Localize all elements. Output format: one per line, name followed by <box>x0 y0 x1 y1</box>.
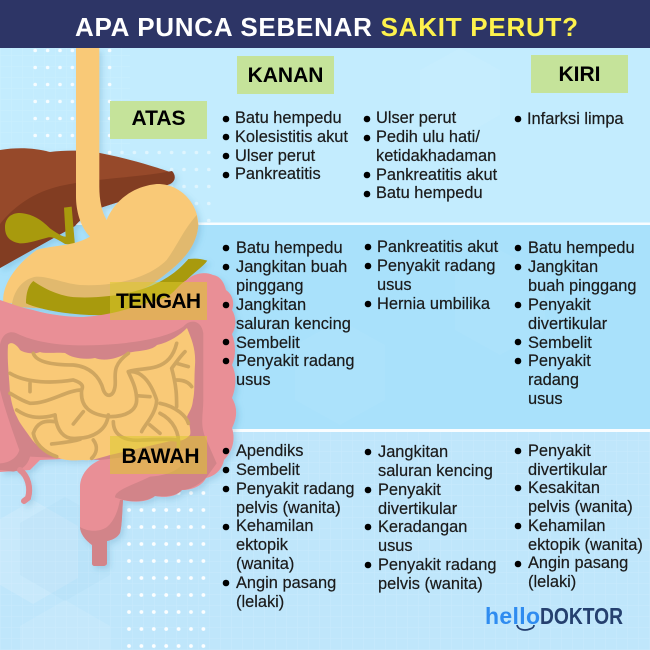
list: bawah kiri: Kesakitan <box>528 479 600 497</box>
list: bawah kiri: Penyakit <box>528 442 591 460</box>
list: bawah kanan: Angin pasang <box>236 574 336 592</box>
list: tengah kiri: Batu hempedu <box>528 239 635 257</box>
list: tengah tengah: usus <box>377 276 412 294</box>
label: KIRI: KIRI <box>558 63 600 86</box>
logo: hello doktor <box>485 603 623 630</box>
list: bawah kanan: (wanita) <box>236 555 294 573</box>
colon <box>0 273 236 566</box>
list: tengah kiri: Sembelit <box>528 334 592 352</box>
list: tengah kanan: Sembelit <box>236 334 300 352</box>
label: TENGAH: TENGAH <box>116 290 201 313</box>
list: bawah tengah: usus <box>378 537 413 555</box>
gallbladder <box>5 207 75 245</box>
list: tengah kiri <box>515 239 636 408</box>
list: bawah kanan: ektopik <box>236 536 289 554</box>
list: bawah tengah: Keradangan <box>378 518 467 536</box>
list: bawah kanan: Sembelit <box>236 461 300 479</box>
list: tengah tengah: Penyakit radang <box>377 257 495 275</box>
title: APA PUNCA SEBENAR SAKIT PERUT? <box>75 12 578 42</box>
stomach and esophagus <box>3 48 198 310</box>
label: KANAN <box>237 56 334 94</box>
list: atas kiri: Infarksi limpa <box>527 110 624 128</box>
illustration: digestive system <box>0 48 236 566</box>
list: bawah kanan <box>223 442 354 611</box>
logo: hello doktor: hello <box>485 603 540 629</box>
list: bawah kanan: pelvis (wanita) <box>236 499 341 517</box>
list: bawah kanan: Apendiks <box>236 442 303 460</box>
list: tengah kanan: saluran kencing <box>236 315 351 333</box>
list: bawah kiri: pelvis (wanita) <box>528 498 633 516</box>
list: tengah kiri: usus <box>528 390 563 408</box>
list: bawah kanan: (lelaki) <box>236 593 284 611</box>
small intestine <box>8 328 195 460</box>
list: tengah kiri: Penyakit <box>528 296 591 314</box>
list: bawah kiri: ektopik (wanita) <box>528 536 643 554</box>
list: tengah kiri: radang <box>528 371 579 389</box>
list: atas tengah: Batu hempedu <box>376 184 483 202</box>
list: bawah tengah: Penyakit <box>378 481 441 499</box>
list: bawah kiri <box>515 442 643 591</box>
list: tengah tengah: Pankreatitis akut <box>377 238 499 256</box>
logo: hello doktor: DOKTOR <box>540 603 623 629</box>
list: bawah kiri: Angin pasang <box>528 554 628 572</box>
list: bawah kiri: Kehamilan <box>528 517 605 535</box>
list: bawah kanan: Kehamilan <box>236 517 313 535</box>
liver <box>0 148 175 268</box>
list: tengah kiri: divertikular <box>528 315 608 333</box>
list: tengah kanan: Jangkitan <box>236 296 306 314</box>
list: atas tengah <box>364 109 498 202</box>
list: bawah kanan: Penyakit radang <box>236 480 354 498</box>
label: BAWAH: BAWAH <box>122 445 200 468</box>
list: bawah kiri: divertikular <box>528 461 608 479</box>
list: tengah kanan: Jangkitan buah <box>236 258 347 276</box>
list: bawah tengah: Penyakit radang <box>378 556 496 574</box>
list: tengah tengah <box>365 238 499 313</box>
list: tengah kanan: Batu hempedu <box>236 239 343 257</box>
appendix <box>20 470 29 501</box>
label: KIRI <box>531 55 628 93</box>
list: tengah kiri: buah pinggang <box>528 277 636 295</box>
list: atas kanan: Kolesistitis akut <box>235 128 348 146</box>
list: atas tengah: Pedih ulu hati/ <box>376 128 480 146</box>
list: bawah tengah: divertikular <box>378 500 458 518</box>
label: KANAN: KANAN <box>248 64 323 87</box>
list: tengah kiri: Jangkitan <box>528 258 598 276</box>
list: tengah kanan: usus <box>236 371 271 389</box>
pancreas <box>26 259 207 315</box>
label: ATAS <box>110 101 207 139</box>
list: bawah tengah: Jangkitan <box>378 443 448 461</box>
list: atas kanan <box>223 109 348 183</box>
list: atas tengah: Pankreatitis akut <box>376 166 498 184</box>
label: TENGAH <box>110 282 207 320</box>
list: atas kanan: Ulser perut <box>235 147 316 165</box>
list: bawah tengah <box>365 443 496 593</box>
list: bawah tengah: pelvis (wanita) <box>378 575 483 593</box>
list: atas tengah: Ulser perut <box>376 109 457 127</box>
list: atas tengah: ketidakhadaman <box>376 147 496 165</box>
list: tengah kanan <box>223 239 354 389</box>
list: tengah kanan: pinggang <box>236 277 303 295</box>
list: atas kanan: Pankreatitis <box>235 165 321 183</box>
list: tengah tengah: Hernia umbilika <box>377 295 491 313</box>
label: BAWAH <box>110 436 207 474</box>
list: bawah tengah: saluran kencing <box>378 462 493 480</box>
list: tengah kanan: Penyakit radang <box>236 352 354 370</box>
list: atas kanan: Batu hempedu <box>235 109 342 127</box>
label: ATAS: ATAS <box>131 107 186 130</box>
header bar <box>0 0 650 48</box>
list: tengah kiri: Penyakit <box>528 352 591 370</box>
list: bawah kiri: (lelaki) <box>528 573 576 591</box>
